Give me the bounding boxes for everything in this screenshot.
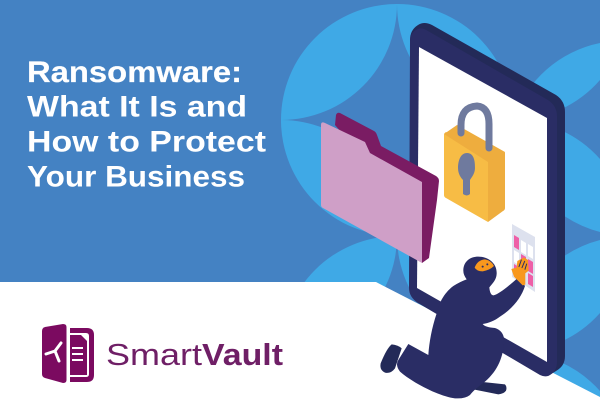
title: Ransomware:: [27, 56, 242, 89]
folder: [321, 113, 439, 263]
title: What It Is and: [27, 90, 247, 124]
padlock: [444, 106, 505, 222]
lock shackle: [461, 106, 489, 148]
ninja face: [475, 259, 494, 271]
logo door: [42, 324, 66, 383]
ninja body: [397, 257, 525, 398]
tablet side: [410, 23, 565, 376]
ninja figure: [380, 257, 529, 398]
title: Your Business: [27, 160, 245, 194]
ninja back foot: [380, 344, 402, 373]
lock body: [444, 132, 488, 222]
tablet: [409, 23, 565, 376]
logo vault frame: [70, 328, 94, 382]
white lower area: [0, 282, 600, 400]
logo door handle: [46, 343, 61, 361]
lock side: [488, 152, 505, 222]
tablet screen: [417, 47, 547, 362]
tablet front: [409, 28, 557, 376]
keypad: [512, 224, 535, 292]
ninja front foot: [473, 381, 506, 394]
SmartVault logo: Vault: [202, 337, 283, 372]
keypad keys: [514, 235, 519, 250]
logo icon: [42, 324, 94, 383]
lock top: [444, 125, 505, 162]
logo document: [70, 335, 87, 375]
ninja hand: [511, 257, 529, 285]
logo wordmark: Smart: [106, 337, 202, 372]
folder back: [335, 113, 439, 263]
folder front: [321, 122, 422, 263]
title: [27, 56, 266, 194]
SmartVault logo: [42, 324, 283, 383]
keyhole: [458, 153, 475, 196]
title: How to Protect: [27, 126, 266, 158]
background lens pattern: [281, 4, 600, 400]
